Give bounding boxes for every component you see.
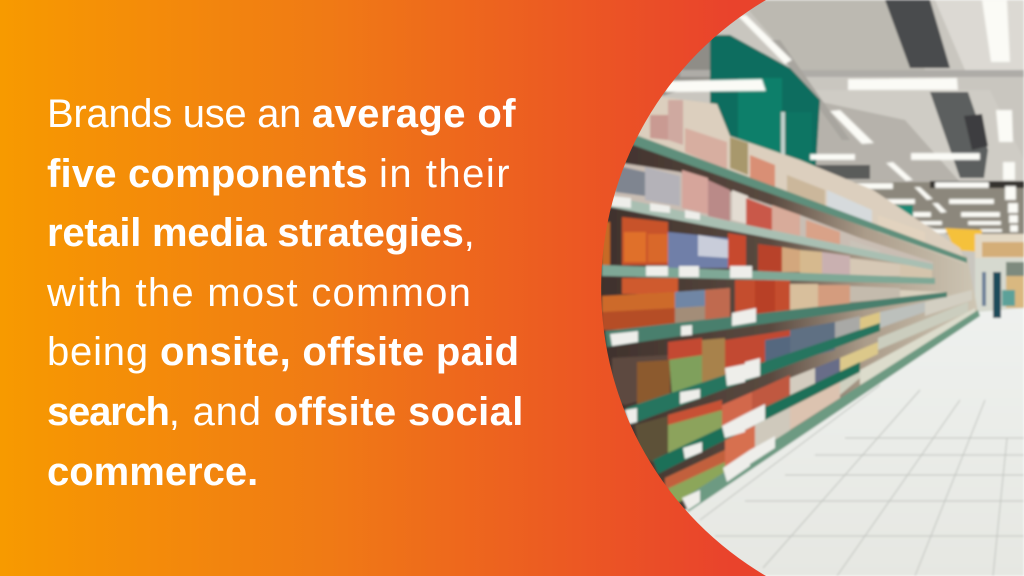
tier 6	[635, 416, 668, 462]
text block: retail media statement: search, and offsite social	[47, 390, 524, 434]
shelving body	[598, 128, 978, 512]
text block: retail media statement: commerce.	[47, 450, 258, 494]
ceiling lights	[665, 0, 1018, 233]
tier 7	[665, 450, 725, 505]
ceiling beam	[680, 70, 1024, 77]
price tags	[610, 196, 775, 510]
ceiling duct	[885, 0, 950, 68]
back wall	[975, 234, 1024, 258]
shelf edges	[602, 134, 980, 512]
text block: retail media statement: retail media strategies,	[47, 211, 475, 255]
text block: retail media statement: with the most common	[47, 271, 472, 315]
tier 3	[602, 222, 610, 265]
tier 5	[612, 355, 668, 405]
tier 1	[633, 97, 966, 264]
text block: retail media statement: being onsite, offsite paid	[47, 330, 519, 374]
shoppers	[993, 272, 1001, 318]
teal wall	[710, 35, 820, 180]
floor	[680, 308, 1024, 576]
text block: retail media statement: Brands use an average of	[47, 92, 516, 136]
tier 4	[622, 278, 678, 294]
text block: retail media statement	[46, 92, 524, 494]
tier 2	[610, 162, 933, 268]
yellow sign	[945, 228, 982, 252]
ceiling	[590, 0, 1024, 300]
floor tile lines	[700, 385, 1024, 576]
text block: retail media statement: five components in their	[47, 152, 511, 196]
